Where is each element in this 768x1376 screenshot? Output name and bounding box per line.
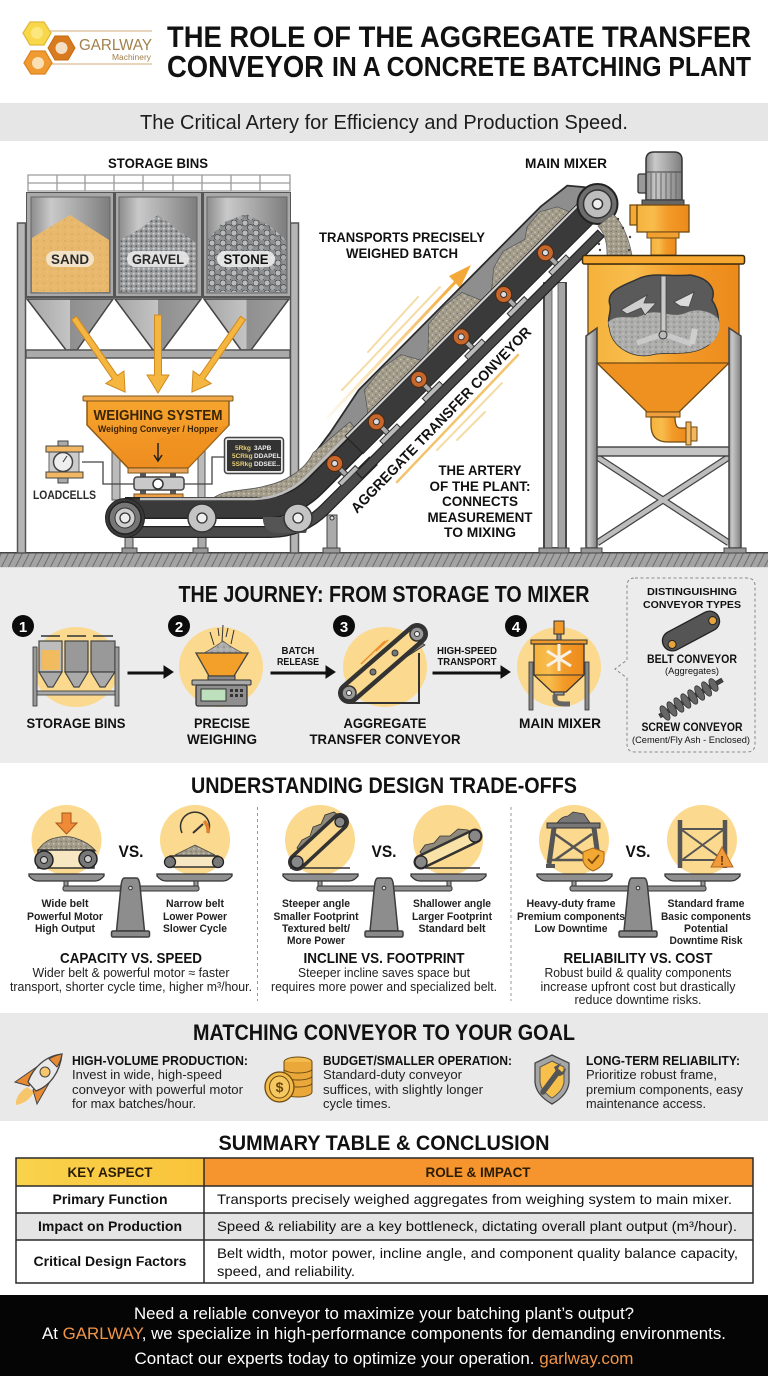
label: stone: STONE: [224, 251, 268, 267]
summary table: KEY ASPECT: [68, 1164, 153, 1180]
trade-off: reliability vs cost: Heavy-duty frame: [526, 898, 616, 910]
step 1: storage bins: 1: [19, 619, 27, 636]
storage bins: [18, 156, 298, 553]
trade-off: incline vs footprint: Textured belt/: [282, 923, 350, 935]
goal: long-term reliability: LONG-TERM RELIABILITY:: [586, 1054, 740, 1068]
trade-off: incline vs footprint: More Power: [287, 935, 346, 947]
goal: high-volume production: for max batches/hour.: [72, 1097, 196, 1111]
trade-off: incline vs footprint: Shallower angle: [413, 898, 491, 910]
heading: summary: SUMMARY TABLE & CONCLUSION: [218, 1132, 550, 1155]
step 3: aggregate transfer conveyor: 3: [340, 619, 348, 636]
icon: screw conveyor: [656, 673, 726, 723]
footer call to action: At GARLWAY, we specialize in high-performance components for demanding environments.: [42, 1325, 726, 1343]
ground: [0, 552, 768, 568]
title: CONVEYOR: [167, 49, 324, 84]
lower material: [212, 422, 358, 499]
step 4: main mixer: 4: [512, 619, 521, 636]
display panel: 5SRkg: [232, 461, 252, 468]
header band: [0, 0, 768, 103]
arrow: high-speed transport: TRANSPORT: [438, 656, 497, 668]
summary table: speed, and reliability.: [217, 1263, 355, 1279]
tank: [582, 205, 744, 445]
heading: matching: MATCHING CONVEYOR TO YOUR GOAL: [193, 1020, 575, 1045]
summary table: Primary Function: [52, 1191, 168, 1207]
step 3: aggregate transfer conveyor: AGGREGATE: [344, 715, 426, 731]
trade-off: capacity vs speed: Lower Power: [163, 911, 228, 923]
summary table: [16, 1158, 753, 1283]
label: transports precisely weighed batch: TRANSPORTS PRECISELY: [319, 230, 485, 245]
arrow: batch release: RELEASE: [277, 656, 319, 668]
summary table: ROLE & IMPACT: [426, 1164, 531, 1180]
trade-off: capacity vs speed: CAPACITY VS. SPEED: [60, 950, 202, 967]
summary table: Speed & reliability are a key bottleneck, dictating overall plant output (m³/hour).: [217, 1218, 737, 1234]
heading: trade-offs: UNDERSTANDING DESIGN TRADE-OFFS: [191, 773, 577, 798]
step 2: precise weighing: WEIGHING: [187, 731, 257, 747]
arrow: to weighing: [128, 666, 173, 678]
logo: GARLWAY: [79, 37, 152, 54]
head pulley: [578, 184, 618, 224]
icon: heavy-duty frame: [546, 812, 604, 871]
icon: coins: [265, 1057, 312, 1102]
icon: coins: $: [276, 1079, 284, 1095]
label: the artery of the plant: [428, 463, 533, 540]
trade-off: reliability vs cost: [517, 805, 751, 1007]
goal: long-term reliability: Prioritize robust frame,: [586, 1068, 717, 1082]
label: loadcells: LOADCELLS: [33, 490, 96, 502]
speed streaks: [328, 265, 518, 482]
heading: the journey: THE JOURNEY: FROM STORAGE TO MIXER: [178, 581, 590, 607]
weighing system: Weighing Conveyer / Hopper: [98, 424, 218, 435]
display panel: 5CRkg: [232, 453, 253, 460]
title: [167, 21, 751, 84]
arrow: batch release: [271, 645, 335, 678]
trade-off: capacity vs speed: transport, shorter cycle time, higher m³/hour.: [10, 980, 252, 994]
trade-off: reliability vs cost: Standard frame: [668, 898, 744, 910]
trade-off: incline vs footprint: Steeper angle: [282, 898, 350, 910]
callout: distinguishing conveyor types: (Cement/Fly Ash - Enclosed): [632, 735, 750, 746]
goal: budget: [265, 1054, 512, 1111]
trade-off: capacity vs speed: Slower Cycle: [163, 923, 227, 935]
trade-off: incline vs footprint: Smaller Footprint: [274, 911, 359, 923]
aggregate transfer conveyor: [106, 171, 620, 538]
callout: distinguishing conveyor types: (Aggregates): [665, 666, 719, 677]
trade-off: incline vs footprint: requires more power and specialized belt.: [271, 980, 497, 994]
footer call to action: [0, 1295, 768, 1376]
callout: distinguishing conveyor types: [615, 578, 755, 752]
summary table: Critical Design Factors: [34, 1253, 187, 1269]
callout: distinguishing conveyor types: DISTINGUISHING: [647, 586, 737, 598]
trade-off: capacity vs speed: Powerful Motor: [27, 911, 104, 923]
goal: long-term reliability: premium components, easy: [586, 1083, 744, 1097]
goal: budget: cycle times.: [323, 1097, 391, 1111]
trade-off: capacity vs speed: Narrow belt: [166, 898, 224, 910]
upper belt bands and rollers: [318, 191, 620, 492]
icon: rocket: [15, 1054, 62, 1105]
trade-off: incline vs footprint: INCLINE VS. FOOTPRINT: [304, 950, 464, 967]
label: gravel: GRAVEL: [132, 251, 184, 267]
icon: steep conveyor: [290, 812, 350, 868]
label: main mixer: MAIN MIXER: [525, 156, 607, 171]
trade-off: incline vs footprint: Steeper incline saves space but: [298, 966, 471, 980]
callout: distinguishing conveyor types: SCREW CONVEYOR: [642, 720, 743, 734]
trade-off: reliability vs cost: Downtime Risk: [670, 935, 743, 947]
balance scale: [537, 874, 740, 937]
mixer frame: [581, 328, 746, 553]
arrow: high-speed transport: [433, 645, 510, 678]
main mixer: [525, 152, 746, 553]
label: transports precisely weighed batch: WEIGHED BATCH: [346, 246, 458, 261]
trade-off: capacity vs speed: Wide belt: [42, 898, 89, 910]
logo: [23, 22, 152, 74]
trade-off: reliability vs cost: reduce downtime risks.: [574, 993, 702, 1007]
display panel: DDSEE..: [254, 461, 280, 468]
plant illustration: [0, 152, 768, 568]
footer call to action: Contact our experts today to optimize your operation. garlway.com: [134, 1350, 634, 1368]
loadcell icon: [46, 441, 83, 483]
trade-off: capacity vs speed: [10, 805, 252, 994]
label: sand: SAND: [51, 251, 89, 267]
label: the artery of the plant: OF THE PLANT:: [430, 479, 530, 494]
panel: design trade-offs: [0, 763, 768, 1013]
trade-off: reliability vs cost: Premium components: [517, 911, 625, 923]
step 1: storage bins: [12, 615, 126, 731]
weighing system: [82, 396, 233, 553]
lower belt bands: [125, 438, 374, 532]
trade-off: incline vs footprint: VS.: [372, 842, 396, 861]
trade-off: capacity vs speed: VS.: [118, 842, 144, 861]
panel: summary: [0, 1121, 768, 1295]
display panel: DDAPEL: [254, 453, 281, 460]
goal: high-volume production: [15, 1054, 248, 1111]
step 3: aggregate transfer conveyor: [310, 615, 460, 747]
label: storage bins: STORAGE BINS: [108, 156, 208, 171]
trade-off: incline vs footprint: Standard belt: [418, 923, 486, 935]
label: aggregate transfer conveyor: AGGREGATE TRANSFER CONVEYOR: [348, 324, 535, 517]
label: the artery of the plant: TO MIXING: [444, 525, 516, 540]
support legs: [323, 283, 569, 553]
display panel: 3APB: [254, 445, 272, 452]
label: the artery of the plant: THE ARTERY: [438, 463, 522, 478]
panel: the journey: [0, 568, 768, 763]
goal: long-term reliability: [535, 1054, 744, 1111]
trade-off: reliability vs cost: Potential: [684, 923, 728, 935]
footer call to action: Need a reliable conveyor to maximize your batching plant’s output?: [134, 1305, 634, 1323]
belt rollers: [106, 498, 312, 538]
label: transports precisely weighed batch: [319, 230, 485, 261]
goal: high-volume production: HIGH-VOLUME PRODUCTION:: [72, 1054, 248, 1068]
trade-off: reliability vs cost: RELIABILITY VS. COST: [564, 950, 712, 967]
goal: budget: suffices, with slightly longer: [323, 1083, 483, 1097]
step 4: main mixer: [505, 615, 601, 731]
balance scale: [29, 874, 232, 937]
subtitle band: [0, 103, 768, 141]
callout: distinguishing conveyor types: CONVEYOR TYPES: [643, 599, 741, 611]
trade-off: incline vs footprint: [271, 805, 497, 994]
subtitle band: The Critical Artery for Efficiency and Production Speed.: [140, 112, 628, 134]
panel: matching conveyor to your goal: [0, 1013, 768, 1121]
goal: high-volume production: conveyor with powerful motor: [72, 1083, 243, 1097]
trade-off: reliability vs cost: increase upfront cost but drastically: [540, 980, 736, 994]
label: the artery of the plant: MEASUREMENT: [428, 510, 533, 525]
upper gray housing and material: [259, 171, 594, 507]
summary table: Impact on Production: [38, 1218, 182, 1234]
trade-off: reliability vs cost: Robust build & quality components: [544, 966, 732, 980]
goal: budget: BUDGET/SMALLER OPERATION:: [323, 1054, 512, 1068]
icon: shallow conveyor: [415, 829, 481, 868]
icon: standard frame: [680, 820, 733, 868]
goal: budget: Standard-duty conveyor: [323, 1068, 462, 1082]
step 2: precise weighing: 2: [175, 619, 183, 636]
material chute: [598, 214, 632, 255]
icon: standard frame: !: [720, 853, 724, 868]
weighing system: WEIGHING SYSTEM: [94, 408, 222, 424]
display panel: [224, 438, 284, 474]
step 1: storage bins: STORAGE BINS: [26, 715, 126, 731]
arrows into hopper: [65, 312, 252, 398]
mixer window: [608, 275, 719, 355]
summary table: Transports precisely weighed aggregates from weighing system to main mixer.: [217, 1191, 732, 1207]
icon: shield and wrench: [535, 1055, 569, 1104]
label: the artery of the plant: CONNECTS: [442, 494, 518, 509]
trade-off: incline vs footprint: Larger Footprint: [412, 911, 492, 923]
step 2: precise weighing: PRECISE: [194, 715, 250, 731]
step 3: aggregate transfer conveyor: TRANSFER CONVEYOR: [310, 731, 460, 747]
trade-off: reliability vs cost: Low Downtime: [534, 923, 608, 935]
step 2: precise weighing: [168, 615, 263, 747]
arrow: high-speed transport: HIGH-SPEED: [437, 645, 497, 657]
icon: gauge and narrow belt: [164, 812, 224, 868]
balance scale: [283, 874, 486, 937]
trade-off: reliability vs cost: Basic components: [661, 911, 751, 923]
summary table: Belt width, motor power, incline angle, and component quality balance capacity,: [217, 1245, 738, 1261]
logo: Machinery: [112, 53, 151, 62]
display panel: 5Rkg: [235, 445, 251, 452]
icon: wide belt: [35, 813, 97, 869]
goal: high-volume production: Invest in wide, high-speed: [72, 1068, 222, 1082]
icon: belt conveyor: [659, 608, 723, 654]
goal: long-term reliability: maintenance access.: [586, 1097, 706, 1111]
trade-off: reliability vs cost: VS.: [626, 842, 650, 861]
motor: [638, 152, 684, 205]
trade-off: capacity vs speed: High Output: [35, 923, 95, 935]
trade-off: capacity vs speed: Wider belt & powerful motor ≈ faster: [32, 966, 230, 980]
arrow: batch release: BATCH: [282, 645, 314, 657]
step 4: main mixer: MAIN MIXER: [519, 715, 601, 731]
callout: distinguishing conveyor types: BELT CONVEYOR: [647, 652, 737, 666]
